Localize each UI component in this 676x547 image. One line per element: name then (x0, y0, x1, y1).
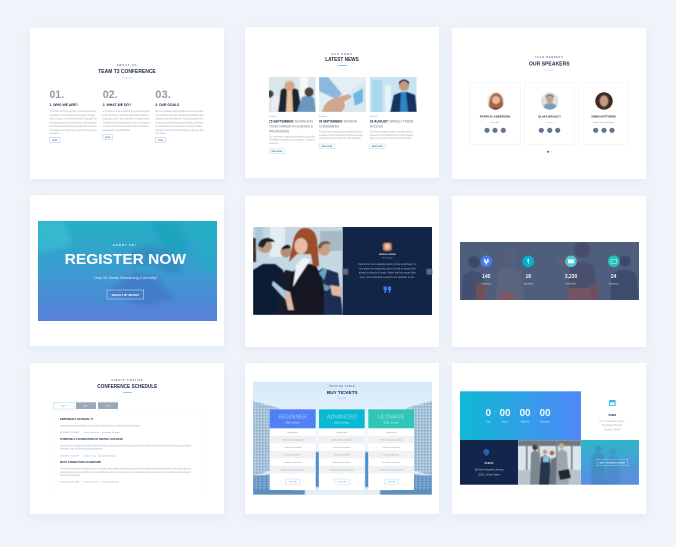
photo: business meeting (518, 440, 581, 485)
countdown: 0 (486, 408, 492, 419)
stats band (460, 242, 639, 300)
register banner: HURRY UP! (113, 243, 137, 247)
column: what we do: in the community by providing opportunities for lifelong (103, 114, 149, 117)
stat: programs: Programs (481, 282, 492, 285)
news excerpt: Our conference's strong strong leadership, promotion (269, 136, 316, 138)
news excerpt: T3 conference strategy together, connecting educators, (370, 131, 414, 134)
session 3: 02:00 PM - 03:00 PM (60, 482, 79, 484)
countdown: Day (486, 422, 491, 424)
speaker card: Patricia Anderson: PATRICIA ANDERSON (480, 115, 511, 118)
pricing card: ultimate: CHOOSE (387, 481, 396, 483)
arrow: previous: ‹ (345, 270, 347, 274)
avatar (383, 242, 392, 251)
session 1: Brianna Anderson (84, 431, 100, 434)
directions tile: GET TICKETS NOW! (599, 462, 626, 464)
panel: buy tickets (245, 363, 439, 514)
banner background hands (38, 222, 217, 306)
column: our goals: 03. (155, 89, 171, 101)
sign up button: SIGN UP NOW! (112, 293, 139, 297)
when block: Municipal, Bielsko (602, 424, 623, 427)
column: who we are: of Georgians committed, and recognized excellence in (50, 129, 97, 132)
speaker card: Emma Matthews (579, 82, 629, 144)
session 2: Anthony King (84, 454, 96, 457)
pricing card: beginner: Ticket and transportation (282, 438, 304, 441)
column: what we do: learning, career development, enlightenment (103, 118, 150, 121)
session 3: Innovation Manager (101, 481, 119, 484)
pricing card: ultimate: Ticket and transportation (380, 438, 402, 441)
day tabs: DAY 1 (61, 404, 66, 408)
pricing card: beginner (270, 409, 316, 490)
stat: sponsors: Sponsors (609, 282, 620, 285)
about us heading: TEAM T3 CONFERENCE (98, 69, 156, 75)
pricing card: beginner: BEGINNER (278, 414, 307, 420)
session 2: Innovation Manager (98, 454, 116, 457)
where block: WHERE (485, 462, 494, 465)
when block: ICC, Corporate Centre, (599, 420, 625, 423)
panel: latest news (245, 27, 439, 178)
session 1: Innovation Manager (102, 431, 120, 434)
quote text: now, your workshop sessions are valuable to me. (360, 276, 415, 279)
quote text: very active the beginning, when I'm flat or devoted for (359, 267, 416, 270)
countdown: 00 (499, 408, 511, 419)
portrait (487, 92, 505, 111)
column: what we do: 2. WHAT WE DO? (103, 103, 131, 107)
column: who we are: excellence. (50, 133, 60, 135)
schedule list (53, 411, 201, 493)
session 2: 11:00 AM - 12:00 PM (60, 454, 79, 457)
session 1: Learning a lot on how technology can help schools and districts meet student needs in the classroom. (60, 424, 141, 427)
session 3: Emma Matthews (84, 481, 99, 484)
column: who we are (50, 89, 97, 142)
stat: attendees (565, 255, 577, 285)
stat: sponsors (608, 255, 620, 285)
column: what we do: 02. (103, 89, 118, 101)
column: what we do: A T3 Conference are an opportunity professional growth (103, 110, 150, 113)
category: Business (370, 116, 378, 118)
speaker card: Emma Matthews: Senior Partner/Manager (593, 121, 615, 124)
column: what we do: research, best, latest and technical and industry (103, 125, 149, 128)
stat: speakers: 18 (526, 274, 531, 280)
countdown: : (534, 410, 536, 416)
pricing card: advanced: CHOOSE (338, 481, 347, 483)
quote text: I found this most valuable portion of the workshops. I'm (358, 263, 417, 266)
panel: our speakers (452, 28, 646, 179)
session 2: PURPOSE A FOUNDATION OF DIGITAL SUCCESS (60, 438, 123, 441)
category: Business (319, 116, 327, 118)
pricing card: ultimate: Registration (386, 431, 397, 434)
session 1: 09:30 AM - 10:30 AM (60, 431, 79, 434)
column: what we do: campus worldwide. (103, 129, 131, 132)
pricing card: ultimate: Dinner and drinks (383, 454, 399, 456)
category: Business (269, 116, 277, 118)
news excerpt: researchers, and professionals to inspire dialogue, (370, 134, 414, 137)
speakers heading (529, 56, 570, 70)
pricing card: beginner: Certificate materials (284, 446, 302, 449)
session 2: technologies that help them along learning journeys. (60, 448, 103, 451)
photo: businessman (370, 77, 417, 112)
icon: map pin (483, 449, 489, 456)
pricing card: beginner: Dinner and drinks (285, 454, 301, 456)
photo: business team (253, 227, 343, 315)
column: who we are: 1. WHO WE ARE? (50, 103, 78, 107)
day tabs: DAY 2 (83, 404, 89, 408)
panel: register now (30, 195, 224, 346)
schedule heading: EVENTS TIMELINE (111, 379, 143, 382)
panel: about us (30, 28, 224, 179)
news item 2 (319, 77, 366, 149)
column: who we are: the leading support and mentoring event and throughout (50, 121, 97, 124)
day tabs (54, 402, 118, 409)
countdown: 00 (519, 408, 531, 419)
pricing card: advanced: Ticket and transportation (331, 438, 353, 441)
pricing card: advanced: ADVANCED (327, 414, 357, 420)
quote text: almost hundreds of ways. When that key areas later (359, 272, 416, 275)
column: who we are: share resources, and address the field's challenges. As (50, 118, 97, 121)
session 3: The school innovation team is available for you in conversation about initiatives, discussing some of the most meaningful measures to lead and learn. Join us to talk about the (60, 468, 192, 471)
pricing card: beginner: $99 / person (286, 422, 300, 425)
pricing card: ultimate: Conference session access (379, 469, 403, 471)
session 2 (60, 438, 192, 457)
news title: ACCESS (370, 125, 383, 129)
news item 1 (266, 77, 316, 154)
register banner (38, 221, 217, 321)
countdown: : (494, 410, 496, 416)
column: who we are: the profession's lifelong learning leadership, conference (50, 125, 97, 128)
pricing card: advanced (319, 409, 365, 490)
news excerpt: share resources, and address the field's challenges. (370, 137, 412, 140)
session 3 (60, 461, 192, 484)
register banner: REGISTER NOW (65, 251, 187, 268)
news title: CONSUMERS (319, 125, 340, 129)
portrait (541, 92, 559, 111)
read more button: READ MORE (372, 145, 384, 148)
latest news heading: OUR NEWS (331, 52, 353, 56)
session 1 (60, 418, 141, 434)
countdown: 00 (539, 408, 551, 419)
countdown (460, 391, 581, 440)
stat: programs (480, 255, 492, 285)
panel: conference schedule (30, 363, 224, 514)
pricing card: beginner: Registration (287, 431, 298, 434)
pricing card: beginner: Breakfast and lunch (284, 461, 302, 464)
countdown: Minutes (521, 420, 530, 424)
column: who we are: researchers, and professionals to inspire dialogue, (50, 114, 96, 117)
speaker card: Patricia Anderson: Secretary (491, 121, 499, 124)
icon: quote mark (384, 286, 391, 293)
column: our goals: MORE (158, 140, 164, 142)
audience silhouettes (462, 242, 639, 300)
sign up button (107, 290, 144, 299)
dark quote panel: PATRICK BURNS (379, 253, 396, 256)
column: our goals: inclusive career development. Among programs here (155, 118, 204, 121)
stat: speakers (522, 255, 534, 285)
pricing card: advanced: Dinner and drinks (334, 454, 350, 456)
speakers heading: TEAM MEMBERS (535, 56, 563, 59)
session 2: Our conference's discussions on building a digital foundation, discussing national best practices and how to create an environment for students to succeed, and explore (60, 444, 192, 447)
panel: statistics (452, 196, 646, 347)
photo: tablet (319, 77, 366, 112)
column: who we are: MORE (52, 140, 58, 142)
column: what we do (103, 89, 150, 140)
speaker card: Blake Bradley (524, 82, 575, 144)
day tabs: DAY 3 (105, 404, 111, 408)
countdown: : (514, 410, 516, 416)
pricing card: advanced: Breakfast and lunch (333, 461, 351, 464)
pricing card: advanced: $199 / person (334, 422, 350, 425)
column: our goals: non-members that create interesting, productive and (155, 114, 204, 117)
pricing card: ultimate: Certificate materials (382, 446, 400, 449)
panel: countdown and venue (452, 363, 646, 514)
schedule heading: CONFERENCE SCHEDULE (97, 384, 158, 390)
where block (460, 440, 518, 485)
stat: sponsors: 24 (611, 274, 617, 280)
speaker card: Blake Bradley: BLAKE BRADLEY (538, 115, 561, 118)
session 1: EMPOWER A NATIONAL IT (60, 418, 93, 421)
schedule heading (97, 379, 158, 393)
pricing card: ultimate (368, 409, 414, 490)
column: our goals: 3. OUR GOALS (155, 103, 179, 107)
social icons (539, 128, 560, 133)
where block: 20021, United States (478, 473, 501, 476)
tickets heading: BUY TICKETS (327, 390, 358, 395)
news title: 09 SEPTEMBER: MODERN (319, 120, 358, 124)
arrow: next: › (429, 270, 431, 274)
session 3: school environments, the possibilities for a more collaborative plan for academic success, and welcomes all voices in education, Your questions are also welcomed. (60, 471, 191, 474)
news item 3 (369, 77, 417, 149)
session 3: MOST CONNECTION LEADERSHIP (60, 461, 101, 464)
pricing card: beginner: CHOOSE (289, 481, 298, 483)
column: our goals: of researchers, and teachers by linking notable (155, 125, 203, 128)
where block: 168 New Hampshire Avenue (474, 469, 504, 472)
news excerpt: researchers, and conference themselves leverage (319, 134, 364, 137)
about us heading (98, 63, 156, 78)
stat: attendees: 3,230 (565, 274, 577, 280)
tickets heading (327, 385, 358, 399)
when block: WHEN (608, 414, 616, 417)
column: who we are: 01. (50, 89, 64, 101)
news title: 15 SEPTEMBER: ADVANCING (269, 120, 314, 124)
speakers heading: OUR SPEAKERS (529, 62, 570, 68)
social icons (593, 128, 615, 133)
column: what we do: MORE (105, 137, 111, 139)
column: our goals: volunteers with influential scientists, audiences and (155, 129, 204, 132)
column: our goals: We're in constant opportunities for members and (155, 110, 204, 113)
social icons (484, 128, 506, 133)
building background (253, 382, 432, 495)
tickets heading: PRICING TABLE (329, 385, 355, 388)
news excerpt: T3 conference's strong against competing discounts, (319, 131, 363, 134)
news title: 18 AUGUST: WORLD TRADE (370, 120, 414, 124)
session 3: Conference Center 1B. (60, 474, 80, 477)
stat: programs: 145 (482, 274, 491, 280)
when block: Bopetti, 99999 (604, 428, 621, 431)
photo: meeting (266, 77, 316, 112)
countdown: Seconds (541, 422, 550, 424)
pricing card: advanced: Certificate materials (333, 446, 351, 449)
news title: PROFESSION (269, 130, 290, 134)
pricing card: advanced: Registration (336, 431, 347, 434)
speaker card: Emma Matthews: EMMA MATTHEWS (592, 115, 616, 118)
latest news heading: LATEST NEWS (325, 57, 359, 63)
column: who we are: T3 Conference brings together, connecting educators, (50, 110, 97, 113)
dark quote panel: Vice President (382, 256, 393, 259)
pricing card: ultimate: $299 / person (384, 422, 399, 425)
arrow: next (426, 269, 432, 275)
stat: attendees: Attendees (566, 282, 577, 285)
carousel dots (547, 151, 552, 153)
column: our goals (155, 89, 204, 142)
latest news heading (325, 52, 359, 66)
pricing card: ultimate: ULTIMATE (378, 414, 405, 420)
icon: calendar (609, 400, 616, 406)
pricing card: beginner: Conference session access (280, 469, 305, 471)
speaker card: Blake Bradley: Partner (546, 121, 553, 124)
read more button: READ MORE (271, 150, 283, 153)
news excerpt: excellence. (269, 143, 279, 145)
read more button: READ MORE (322, 145, 333, 148)
register banner: Only 60 Seats Remaining Currently! (94, 275, 157, 280)
speaker card: Patricia Anderson (470, 82, 520, 144)
when block (599, 400, 625, 431)
dark quote panel (343, 227, 432, 315)
pricing card: ultimate: Breakfast and lunch (382, 461, 400, 464)
stat: speakers: Speakers (523, 282, 534, 285)
panel: testimonial (245, 196, 439, 347)
news excerpt: of intelligent innovation, and recognition of science's (269, 139, 316, 142)
portrait (595, 92, 613, 112)
news excerpt: shared resources, and address the field's challenges. (319, 137, 361, 140)
countdown: Hours (502, 420, 509, 424)
pricing card: advanced: Conference session access (330, 469, 354, 471)
arrow: previous (342, 269, 348, 275)
about us heading: ABOUT US (117, 63, 137, 67)
column: our goals: are those serving growing international community (155, 121, 204, 124)
news title: YOUR CAREER IN SCIENCE & (269, 125, 314, 129)
column: our goals: new voices. (155, 133, 167, 135)
directions tile (581, 440, 639, 485)
column: what we do: networking. By supporting the future of education (103, 121, 150, 124)
